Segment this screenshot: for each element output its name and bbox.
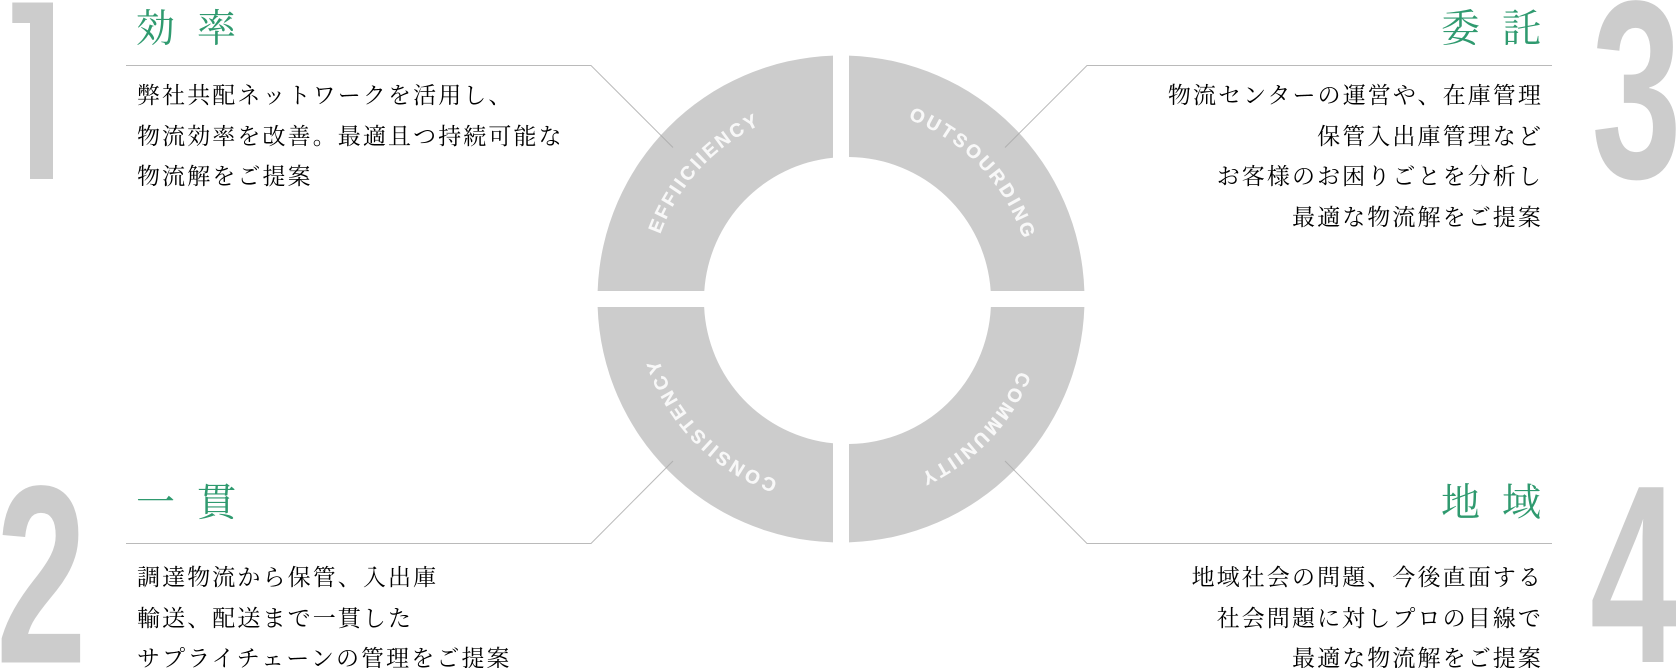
leader line: community <box>1005 461 1552 544</box>
text block: consistency: 輸送、配送まで一貫した <box>137 606 413 631</box>
leader line: consistency <box>126 461 673 544</box>
ring segment: community: COMMUNIITY <box>925 373 1030 486</box>
text block: consistency <box>137 565 512 668</box>
text block: community: 社会問題に対しプロの目線で <box>1217 606 1543 631</box>
panel: community <box>1192 482 1552 668</box>
ring segment: consistency <box>598 307 833 542</box>
panel: consistency <box>136 482 512 668</box>
text block: community: 地域社会の問題、今後直面する <box>1192 565 1543 590</box>
text block: efficiency: 物流解をご提案 <box>137 164 313 189</box>
text block: outsourding: 保管入出庫管理など <box>1317 124 1543 149</box>
text block: outsourding: 最適な物流解をご提案 <box>1292 205 1543 230</box>
panel: outsourding <box>1168 8 1552 230</box>
leader line: efficiency <box>126 66 673 148</box>
leader line: outsourding <box>1005 66 1552 148</box>
ring segment: efficiency: EFFIICIIENCY <box>648 114 755 234</box>
panel: efficiency <box>136 8 564 189</box>
text block: outsourding: お客様のお困りごとを分析し <box>1217 164 1543 189</box>
text block: community <box>1192 565 1543 668</box>
ring segment: outsourding <box>849 56 1084 291</box>
text block: efficiency: 弊社共配ネットワークを活用し、 <box>137 83 514 108</box>
ring segment: consistency: CONSIISTENCY <box>646 364 776 491</box>
text block: efficiency: 物流効率を改善。最適且つ持続可能な <box>137 124 564 149</box>
ring segment: community <box>849 307 1084 542</box>
text block: outsourding <box>1168 83 1543 230</box>
text block: consistency: 調達物流から保管、入出庫 <box>137 565 438 590</box>
heading: consistency: 一貫 <box>136 482 258 525</box>
ring segment: efficiency <box>598 56 833 291</box>
heading: efficiency: 効率 <box>136 8 258 51</box>
ring segment: outsourding: OUTSOURDING <box>910 108 1034 237</box>
text block: outsourding: 物流センターの運営や、在庫管理 <box>1168 83 1543 108</box>
text block: efficiency <box>137 83 564 189</box>
